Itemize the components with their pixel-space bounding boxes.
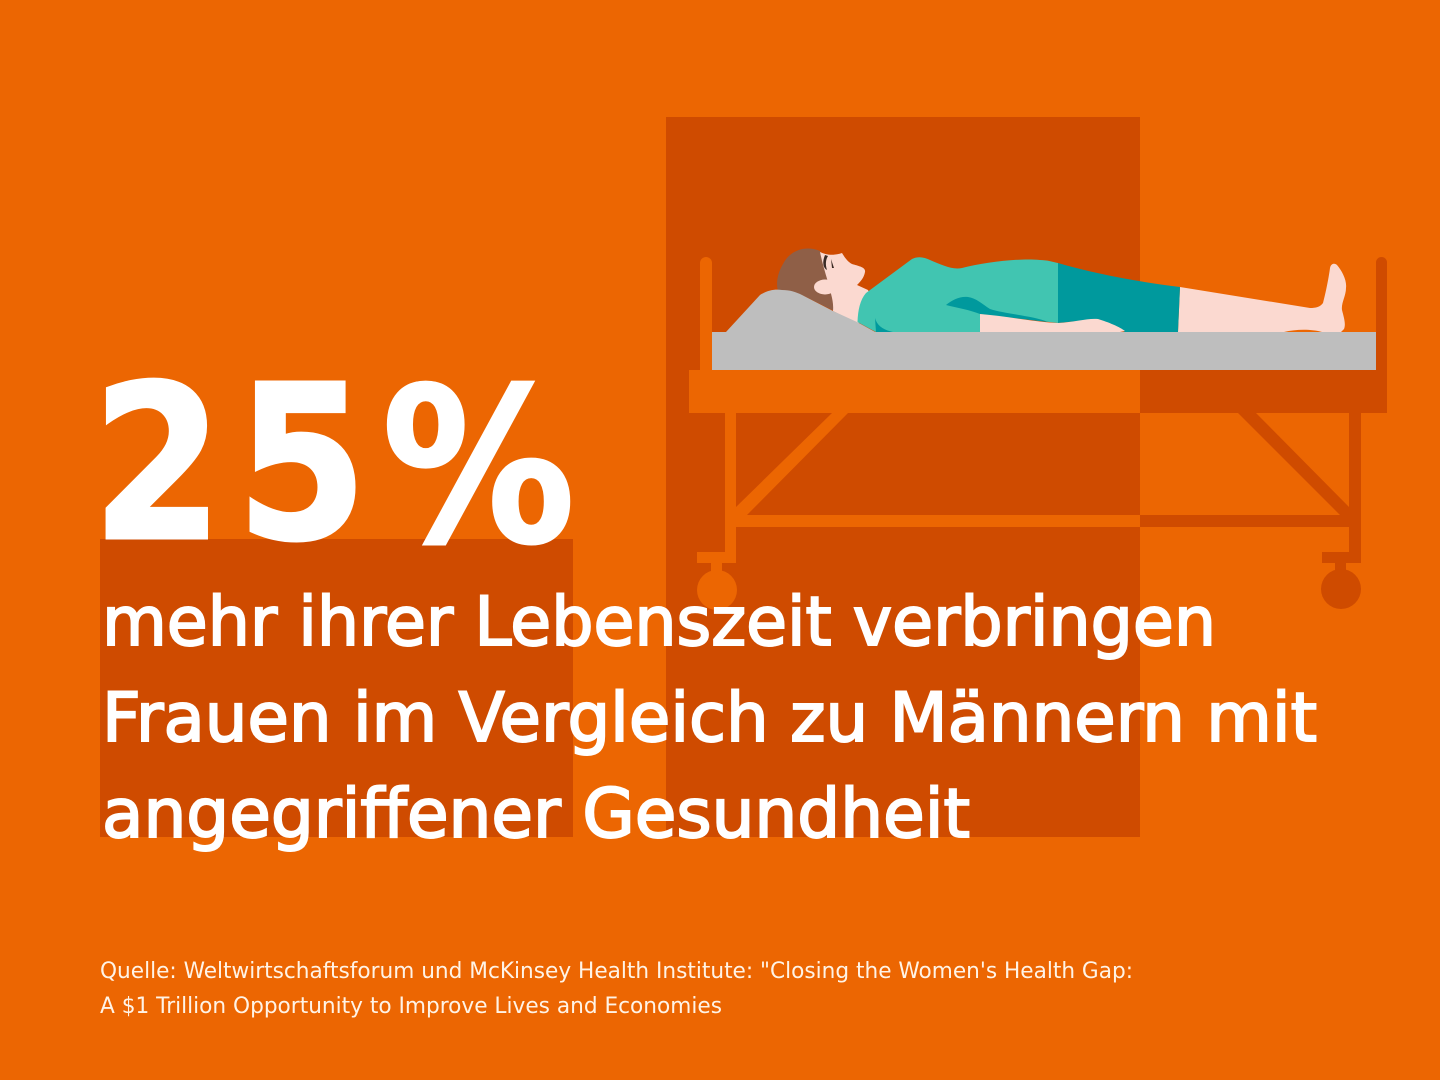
shorts xyxy=(1058,263,1180,332)
eye and eyebrow xyxy=(823,255,834,270)
mattress xyxy=(712,332,1376,370)
statistic: 25%: 25 xyxy=(92,339,367,589)
ear xyxy=(814,280,836,294)
shirt fold xyxy=(946,297,1048,322)
statistic: 25% xyxy=(92,339,575,593)
source note: A $1 Trillion Opportunity to Improve Lives and Economies xyxy=(100,994,722,1019)
description text: angegriffener Gesundheit xyxy=(102,775,970,854)
shirt hem shade xyxy=(875,318,893,332)
bed frame: dark part on light background xyxy=(1140,257,1387,609)
heel shadow xyxy=(1284,330,1322,332)
source note xyxy=(100,959,1133,1019)
panel: tall dark rectangle behind bed xyxy=(666,117,1140,837)
statistic: 25%: % xyxy=(382,343,575,593)
description text xyxy=(102,583,1317,854)
panel: dark rectangle behind statistic xyxy=(100,539,573,837)
leg and foot xyxy=(1178,264,1346,332)
hair xyxy=(777,249,838,312)
description text: mehr ihrer Lebenszeit verbringen xyxy=(102,583,1216,662)
bed frame: light part on dark panel xyxy=(689,257,1140,610)
description text: Frauen im Vergleich zu Männern mit xyxy=(102,679,1317,758)
shirt xyxy=(858,257,1058,332)
pillow xyxy=(726,290,877,333)
patient xyxy=(777,249,1346,332)
arm xyxy=(980,314,1125,332)
illustration: hospital bed with patient xyxy=(689,249,1387,610)
face and neck xyxy=(820,252,872,324)
source note: Quelle: Weltwirtschaftsforum und McKinsey Health Institute: "Closing the Women's Health Gap: xyxy=(100,959,1133,984)
